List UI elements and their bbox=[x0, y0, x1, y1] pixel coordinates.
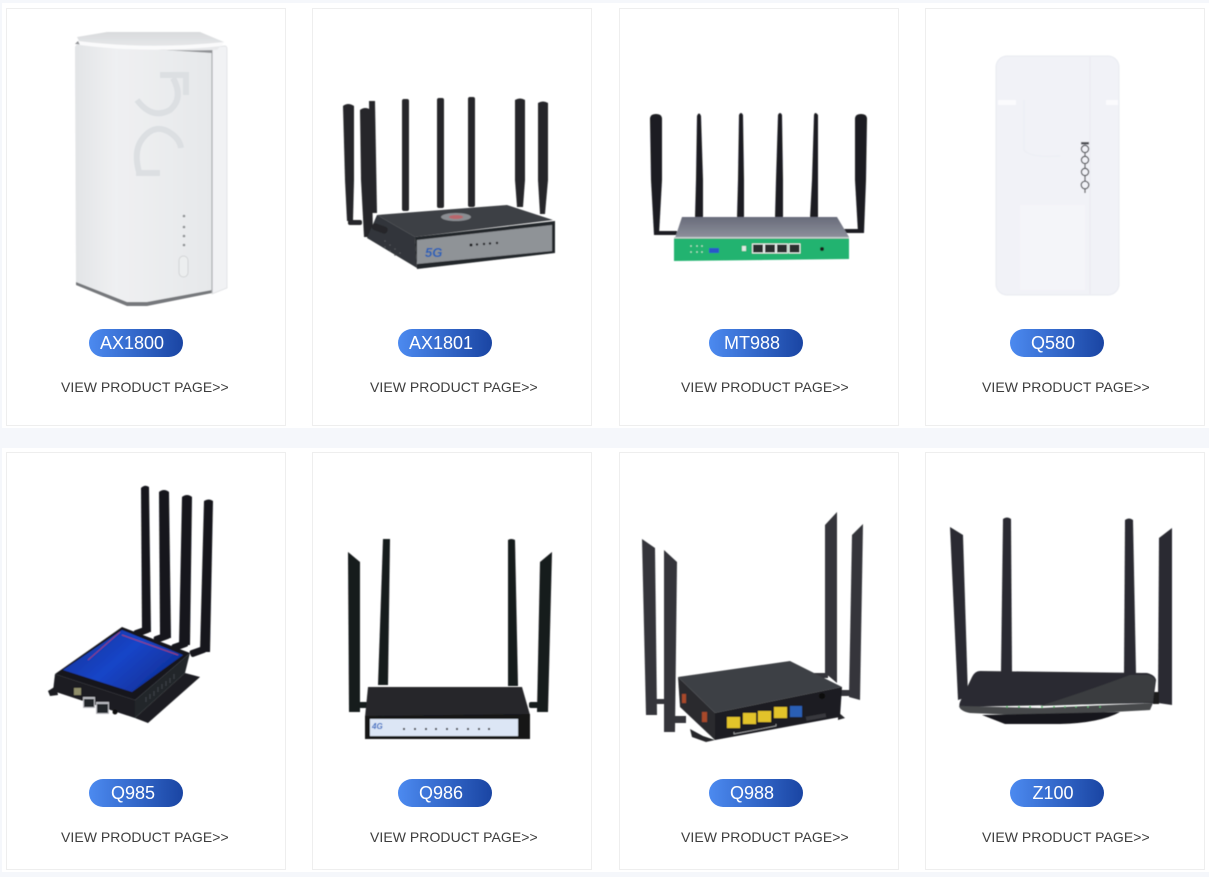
model badge bbox=[89, 779, 183, 807]
model badge: AX1800 bbox=[100, 333, 164, 353]
panel: Q986 bbox=[312, 452, 592, 870]
model badge: Q580 bbox=[1031, 333, 1075, 353]
4G logo: 4G bbox=[371, 722, 383, 731]
model badge bbox=[398, 779, 492, 807]
model badge: Q988 bbox=[730, 783, 774, 803]
icon: AX1800 tower router bbox=[75, 32, 227, 306]
panel: Z100 bbox=[926, 452, 1204, 870]
card frame bbox=[6, 8, 286, 426]
panel: Q988 bbox=[620, 452, 898, 870]
product link: VIEW PRODUCT PAGE>> bbox=[370, 829, 538, 845]
model badge bbox=[709, 329, 803, 357]
card frame bbox=[620, 8, 898, 426]
icon: Q580 white outdoor unit bbox=[996, 56, 1119, 295]
icon: AX1801 eight-antenna router bbox=[343, 97, 555, 269]
5G logo: 5G bbox=[425, 245, 442, 260]
panel: AX1801 bbox=[312, 8, 592, 426]
logo rings bbox=[1081, 142, 1089, 193]
product link: VIEW PRODUCT PAGE>> bbox=[61, 829, 229, 845]
panel: Q580 bbox=[926, 8, 1204, 426]
product link: VIEW PRODUCT PAGE>> bbox=[681, 829, 849, 845]
icon: Q985 blue-top router bbox=[48, 486, 213, 723]
model badge: MT988 bbox=[724, 333, 780, 353]
product link: VIEW PRODUCT PAGE>> bbox=[982, 829, 1150, 845]
card frame bbox=[620, 452, 898, 870]
panel: AX1800 bbox=[6, 8, 286, 426]
card frame bbox=[312, 452, 592, 870]
mounting flanges bbox=[135, 673, 200, 723]
icon: Q988 rear-port router bbox=[642, 512, 863, 742]
embossed 5G mark bbox=[136, 75, 186, 173]
card frame bbox=[312, 8, 592, 426]
card frame bbox=[926, 8, 1204, 426]
model badge bbox=[1010, 329, 1104, 357]
icon: MT988 green router bbox=[650, 113, 867, 261]
panel: Q985 bbox=[6, 452, 286, 870]
model badge: Q985 bbox=[111, 783, 155, 803]
model badge bbox=[1010, 779, 1104, 807]
card frame bbox=[926, 452, 1204, 870]
product link: VIEW PRODUCT PAGE>> bbox=[982, 379, 1150, 395]
model badge: Q986 bbox=[419, 783, 463, 803]
model badge: Z100 bbox=[1032, 783, 1074, 803]
product link: VIEW PRODUCT PAGE>> bbox=[370, 379, 538, 395]
model badge bbox=[89, 329, 183, 357]
product link: VIEW PRODUCT PAGE>> bbox=[61, 379, 229, 395]
model badge bbox=[709, 779, 803, 807]
icon: Q986 four-antenna router bbox=[348, 539, 552, 739]
model badge bbox=[398, 329, 492, 357]
model badge: AX1801 bbox=[409, 333, 473, 353]
icon: Z100 black router bbox=[950, 518, 1172, 724]
card frame bbox=[6, 452, 286, 870]
product link: VIEW PRODUCT PAGE>> bbox=[681, 379, 849, 395]
panel: MT988 bbox=[620, 8, 898, 426]
